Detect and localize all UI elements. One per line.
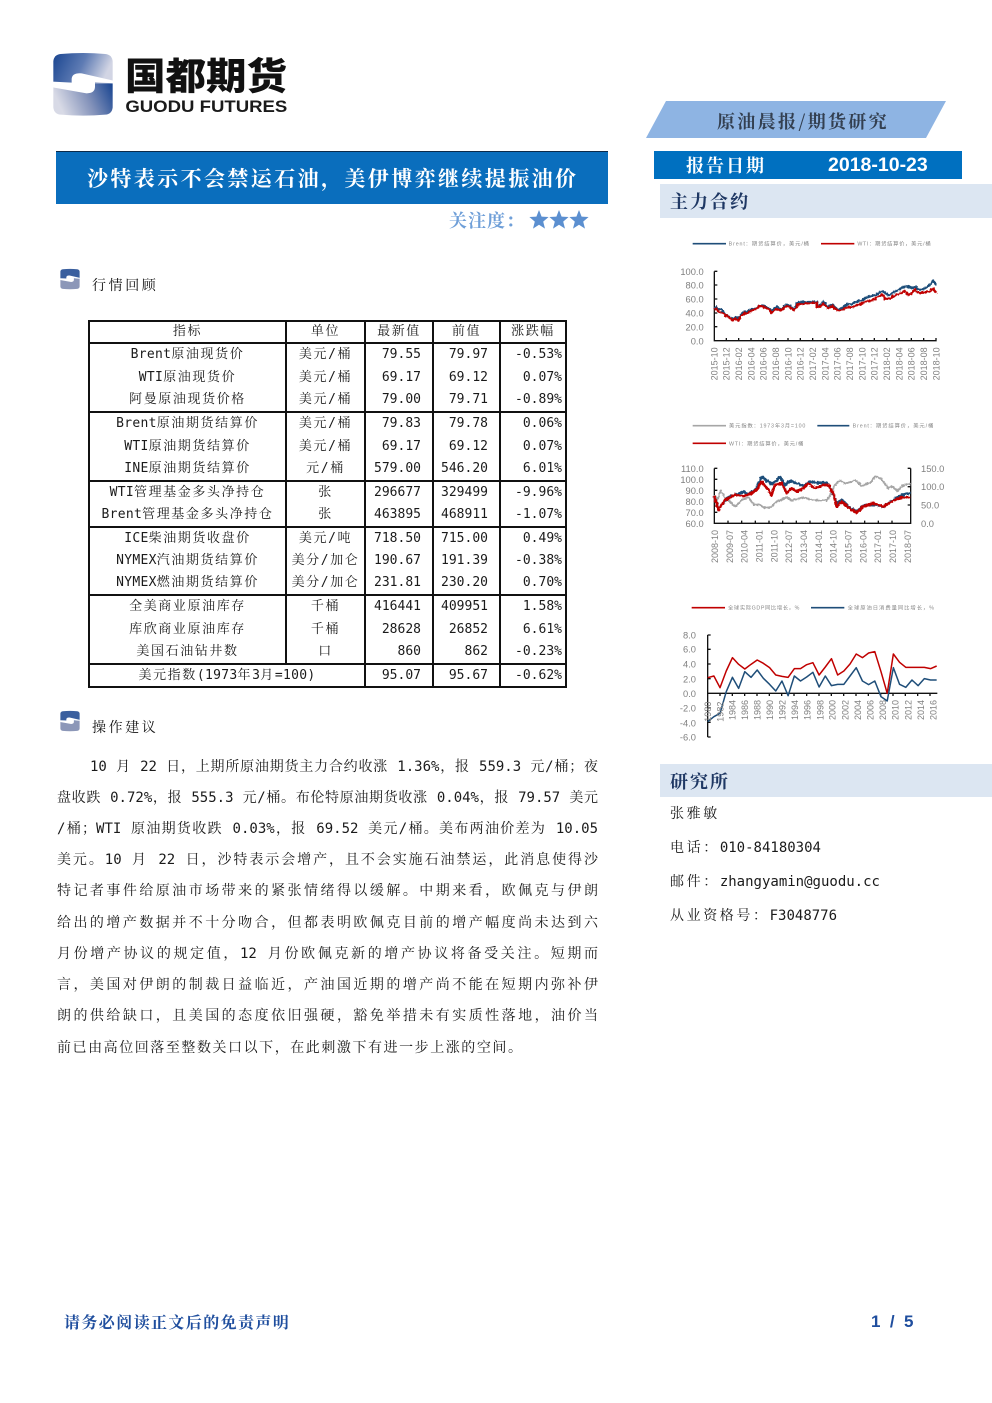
chart: dollar index vs Brent and WTI: 2011-01 xyxy=(754,530,764,562)
category banner xyxy=(646,101,946,138)
market data table: 涨跌幅 xyxy=(511,324,555,339)
market data table: 美元/桶 xyxy=(299,370,352,384)
chart: world GDP vs oil consumption growth: 1982 xyxy=(715,702,725,722)
market data table: ICE柴油期货收盘价 xyxy=(124,531,251,546)
heading: main contract xyxy=(660,184,992,218)
report date value: 2018-10-23 xyxy=(828,154,928,176)
chart: dollar index vs Brent and WTI: 2013-04 xyxy=(799,530,809,563)
report date bar xyxy=(654,151,962,179)
market data table: 79.83 xyxy=(382,416,421,431)
market data table: 美元/桶 xyxy=(299,392,352,407)
body text: 美元。10 月 22 日，沙特表示会增产，且不会实施石油禁运，此消息使得沙 xyxy=(57,852,598,868)
chart: world GDP vs oil consumption growth: -6.0 xyxy=(680,733,696,743)
icon: section bullet operation advice xyxy=(60,710,80,732)
market data table: -0.62% xyxy=(515,668,562,682)
icon: section bullet market review xyxy=(60,268,80,290)
page number: 1 / 5 xyxy=(871,1312,914,1331)
chart: Brent and WTI settlement price: 100.0 xyxy=(680,267,704,277)
chart: Brent and WTI settlement price: 40.0 xyxy=(686,309,704,319)
chart: world GDP vs oil consumption growth: 2014 xyxy=(916,700,926,720)
chart: Brent and WTI settlement price: 2016-04 xyxy=(746,347,756,380)
chart: Brent and WTI settlement price: 80.0 xyxy=(686,281,704,291)
chart: dollar index vs Brent and WTI: 2012-07 xyxy=(784,530,794,563)
chart: Brent and WTI settlement price: 0.0 xyxy=(691,336,704,346)
chart: world GDP vs oil consumption growth: 2016 xyxy=(929,700,939,720)
analyst contact: 张雅敏 xyxy=(670,806,720,822)
chart: world GDP vs oil consumption growth: 1984 xyxy=(728,700,738,720)
chart: world GDP vs oil consumption growth xyxy=(680,604,939,743)
market data table: -1.07% xyxy=(515,507,562,522)
market data table: 千桶 xyxy=(311,622,340,636)
legend xyxy=(692,604,934,612)
market data table: 190.67 xyxy=(374,553,421,568)
heading: research institute xyxy=(660,764,992,797)
chart: dollar index vs Brent and WTI: 2014-10 xyxy=(829,530,839,563)
market data table: 美元/桶 xyxy=(299,416,352,431)
chart: Brent and WTI settlement price: 60.0 xyxy=(686,295,704,305)
market data table: 715.00 xyxy=(441,531,488,546)
chart: Brent and WTI settlement price: 2017-12 xyxy=(870,347,880,380)
market data table: 463895 xyxy=(374,507,421,522)
legend: 全球原油日消费量同比增长，% xyxy=(848,604,934,612)
market data table: -0.23% xyxy=(515,644,562,659)
chart: world GDP vs oil consumption growth: 1988 xyxy=(752,700,762,720)
market data table: 26852 xyxy=(449,622,488,636)
body text: /桶；WTI 原油期货收跌 0.03%，报 69.52 美元/桶。美布两油价差为 10.05 xyxy=(57,821,598,837)
chart: Brent and WTI settlement price: 2016-06 xyxy=(759,347,769,380)
market data table: 最新值 xyxy=(377,324,421,339)
market data table: 美分/加仑 xyxy=(292,575,359,590)
market data table: 579.00 xyxy=(374,461,421,476)
market data table: 860 xyxy=(398,644,421,659)
market data table xyxy=(88,320,567,688)
chart: world GDP vs oil consumption growth: 2010 xyxy=(891,700,901,720)
market data table: 6.01% xyxy=(523,461,562,476)
legend: 全球实际GDP同比增长，% xyxy=(728,604,800,612)
heading: operation advice: 操作建议 xyxy=(92,720,158,736)
chart: dollar index vs Brent and WTI: 2010-04 xyxy=(740,530,750,563)
market data table: 191.39 xyxy=(441,553,488,568)
market data table: 69.12 xyxy=(449,370,488,384)
legend: Brent：期货结算价，美元/桶 xyxy=(729,240,809,248)
market data table: -0.89% xyxy=(515,392,562,407)
market data table: 546.20 xyxy=(441,461,488,476)
market data table: Brent原油期货结算价 xyxy=(116,416,259,431)
chart: Brent and WTI settlement price: 2016-08 xyxy=(771,347,781,380)
chart: world GDP vs oil consumption growth: 1986 xyxy=(740,700,750,720)
heading: main contract: 主力合约 xyxy=(670,188,750,214)
chart: world GDP vs oil consumption growth: 8.0 xyxy=(683,631,696,641)
analyst contact: 从业资格号：F3048776 xyxy=(670,908,837,924)
market data table: 862 xyxy=(465,644,488,659)
chart: dollar index vs Brent and WTI: 110.0 xyxy=(681,464,704,474)
chart: dollar index vs Brent and WTI: 2017-10 xyxy=(888,530,898,563)
body text: 盘收跌 0.72%，报 555.3 元/桶。布伦特原油期货收涨 0.04%，报 79.57 美元 xyxy=(57,790,598,806)
chart: dollar index vs Brent and WTI: 0.0 xyxy=(921,519,934,529)
chart: world GDP vs oil consumption growth: 2.0 xyxy=(683,675,696,685)
market data table: 69.12 xyxy=(449,438,488,454)
market data table: 张 xyxy=(318,485,333,500)
market data table: 409951 xyxy=(441,599,488,614)
chart: dollar index vs Brent and WTI: 2018-07 xyxy=(903,530,913,563)
market data table: 美元指数(1973年3月=100) xyxy=(138,668,316,682)
market data table: WTI原油期货结算价 xyxy=(124,438,251,454)
market data table: 95.67 xyxy=(449,668,488,682)
market data table: -0.53% xyxy=(515,347,562,362)
heading: research institute: 研究所 xyxy=(670,768,730,794)
legend: 美元指数：1973年3月=100 xyxy=(729,422,805,430)
market data table: 元/桶 xyxy=(306,461,345,476)
title bar: 沙特表示不会禁运石油，美伊博弈继续提振油价 xyxy=(87,163,578,193)
chart: Brent and WTI settlement price: 2017-10 xyxy=(857,347,867,380)
body text: 10 月 22 日，上期所原油期货主力合约收涨 1.36%，报 559.3 元/桶；夜 xyxy=(90,759,598,775)
chart: world GDP vs oil consumption growth: 4.0 xyxy=(683,660,696,670)
footer disclaimer: 请务必阅读正文后的免责声明 xyxy=(64,1310,290,1333)
market data table: 468911 xyxy=(441,507,488,522)
body text: 前已由高位回落至整数关口以下，在此刺激下有进一步上涨的空间。 xyxy=(57,1040,524,1056)
body text: 特记者事件给原油市场带来的紧张情绪得以缓解。中期来看，欧佩克与伊朗 xyxy=(57,883,598,899)
market data table: 230.20 xyxy=(441,575,488,590)
legend: WTI：期货结算价，美元/桶 xyxy=(857,240,931,248)
chart: world GDP vs oil consumption growth: 1998 xyxy=(815,700,825,720)
legend: WTI：期货结算价，美元/桶 xyxy=(729,439,803,447)
chart: world GDP vs oil consumption growth: 1992 xyxy=(777,700,787,720)
analyst contact: 邮件：zhangyamin@guodu.cc xyxy=(670,874,880,890)
category banner text: 原油晨报/期货研究 xyxy=(717,108,889,134)
chart: Brent and WTI settlement price: 2017-02 xyxy=(808,347,818,380)
chart: dollar index vs Brent and WTI: 50.0 xyxy=(921,501,939,511)
chart: dollar index vs Brent and WTI xyxy=(680,422,944,563)
market data table: 全美商业原油库存 xyxy=(129,599,246,614)
chart: world GDP vs oil consumption growth: 2012 xyxy=(903,700,913,720)
market data table: 美分/加仑 xyxy=(292,553,359,568)
attention rating xyxy=(449,207,588,233)
chart: world GDP vs oil consumption growth: 2002 xyxy=(840,700,850,720)
chart: Brent and WTI settlement price: 2018-02 xyxy=(882,347,892,380)
chart: world GDP vs oil consumption growth: 2004 xyxy=(853,700,863,720)
body text: 朗的供给缺口，且美国的态度依旧强硬，豁免举措未有实质性落地，油价当 xyxy=(57,1008,598,1024)
chart: Brent and WTI settlement price: 2018-08 xyxy=(919,347,929,380)
chart: dollar index vs Brent and WTI: 2008-10 xyxy=(710,530,720,563)
market data table: WTI管理基金多头净持仓 xyxy=(110,485,265,500)
market data table: 库欣商业原油库存 xyxy=(129,622,246,636)
market data table: 1.58% xyxy=(523,599,562,614)
chart: Brent and WTI settlement price: 20.0 xyxy=(686,322,704,332)
logo: Guodu Futures: 国都期货 xyxy=(125,46,287,100)
market data table: 231.81 xyxy=(374,575,421,590)
chart: dollar index vs Brent and WTI: 60.0 xyxy=(686,519,704,529)
chart: dollar index vs Brent and WTI: 2017-01 xyxy=(873,530,883,563)
market data table: 28628 xyxy=(382,622,421,636)
chart: dollar index vs Brent and WTI: 80.0 xyxy=(686,497,704,507)
market data table: 阿曼原油现货价格 xyxy=(129,392,246,407)
market data table: WTI原油现货价 xyxy=(139,370,236,384)
market data table: 6.61% xyxy=(523,622,562,636)
market data table: 718.50 xyxy=(374,531,421,546)
market data table: 69.17 xyxy=(382,370,421,384)
body text: 月份增产协议的规定值，12 月份欧佩克新的增产协议将备受关注。短期而 xyxy=(57,946,598,962)
chart: dollar index vs Brent and WTI: 2014-01 xyxy=(814,530,824,563)
chart: dollar index vs Brent and WTI: 2009-07 xyxy=(725,530,735,563)
chart: world GDP vs oil consumption growth: 2008 xyxy=(878,700,888,720)
market data table: Brent原油现货价 xyxy=(131,347,244,362)
chart: Brent and WTI settlement price: 2016-10 xyxy=(783,347,793,380)
body text: 言，美国对伊朗的制裁日益临近，产油国近期的增产尚不能在短期内弥补伊 xyxy=(57,977,598,993)
chart: Brent and WTI settlement price: 2015-12 xyxy=(722,347,732,380)
chart: dollar index vs Brent and WTI: 150.0 xyxy=(921,464,944,474)
chart: world GDP vs oil consumption growth: 1990 xyxy=(765,700,775,720)
chart: Brent and WTI settlement price: 2016-12 xyxy=(796,347,806,380)
chart: Brent and WTI settlement price: 2018-04 xyxy=(894,347,904,380)
chart: world GDP vs oil consumption growth: -2.0 xyxy=(680,704,696,714)
market data table: 329499 xyxy=(441,485,488,500)
market data table: 0.70% xyxy=(523,575,562,590)
market data table: 69.17 xyxy=(382,438,421,454)
chart: world GDP vs oil consumption growth: 1996 xyxy=(803,700,813,720)
chart: dollar index vs Brent and WTI: 100.0 xyxy=(680,475,704,485)
market data table: 0.07% xyxy=(523,370,562,384)
chart: Brent and WTI settlement price xyxy=(680,240,941,380)
market data table: 千桶 xyxy=(311,599,340,614)
market data table: 79.78 xyxy=(449,416,488,431)
market data table: 79.97 xyxy=(449,347,488,362)
legend: Brent：期货结算价，美元/桶 xyxy=(853,422,933,430)
market data table: 0.07% xyxy=(523,438,562,454)
heading: market review: 行情回顾 xyxy=(92,278,158,294)
analyst contact: 电话：010-84180304 xyxy=(670,840,821,856)
chart: world GDP vs oil consumption growth: 1994 xyxy=(790,700,800,720)
market data table: 美元/吨 xyxy=(299,531,352,546)
market data table: 79.00 xyxy=(382,392,421,407)
chart: world GDP vs oil consumption growth: 2000 xyxy=(828,700,838,720)
body text: 给出的增产数据并不十分吻合，但都表明欧佩克目前的增产幅度尚未达到六 xyxy=(57,915,598,931)
chart: dollar index vs Brent and WTI: 100.0 xyxy=(921,482,944,492)
market data table: 指标 xyxy=(173,324,202,339)
chart: dollar index vs Brent and WTI: 90.0 xyxy=(686,486,704,496)
chart: world GDP vs oil consumption growth: 0.0 xyxy=(683,689,696,699)
report date label: 报告日期 xyxy=(686,152,766,178)
logo: Guodu Futures: GUODU FUTURES xyxy=(125,97,287,116)
market data table: NYMEX汽油期货结算价 xyxy=(116,553,259,568)
market data table: 416441 xyxy=(374,599,421,614)
body text xyxy=(57,758,598,1056)
rating stars xyxy=(530,210,588,229)
market data table: 95.07 xyxy=(382,668,421,682)
market data table: 前值 xyxy=(452,324,481,339)
market data table: 张 xyxy=(318,507,333,522)
market data table: Brent管理基金多头净持仓 xyxy=(101,507,274,522)
market data table: 口 xyxy=(318,644,333,659)
title bar xyxy=(56,151,608,204)
chart: Brent and WTI settlement price: 2015-10 xyxy=(709,347,719,380)
market data table: INE原油期货结算价 xyxy=(124,461,251,476)
attention rating: 关注度： xyxy=(449,207,525,233)
legend xyxy=(693,422,933,447)
market data table: 79.71 xyxy=(449,392,488,407)
chart: world GDP vs oil consumption growth: 1980 xyxy=(703,702,713,722)
chart: Brent and WTI settlement price: 2017-04 xyxy=(820,347,830,380)
market data table: NYMEX燃油期货结算价 xyxy=(116,575,259,590)
chart: Brent and WTI settlement price: 2017-06 xyxy=(833,347,843,380)
market data table: 79.55 xyxy=(382,347,421,362)
market data table: 0.06% xyxy=(523,416,562,431)
market data table: 美元/桶 xyxy=(299,347,352,362)
market data table: -9.96% xyxy=(515,485,562,500)
market data table: 美元/桶 xyxy=(299,438,352,454)
chart: dollar index vs Brent and WTI: 2015-07 xyxy=(844,530,854,563)
chart: Brent and WTI settlement price: 2017-08 xyxy=(845,347,855,380)
market data table: -0.38% xyxy=(515,553,562,568)
market data table: 单位 xyxy=(311,324,340,339)
legend xyxy=(693,240,931,248)
chart: Brent and WTI settlement price: 2018-10 xyxy=(931,347,941,380)
chart: world GDP vs oil consumption growth: -4.0 xyxy=(680,718,696,728)
market data table: 0.49% xyxy=(523,531,562,546)
chart: Brent and WTI settlement price: 2016-02 xyxy=(734,347,744,380)
market data table: 296677 xyxy=(374,485,421,500)
chart: dollar index vs Brent and WTI: 2011-10 xyxy=(769,530,779,562)
chart: dollar index vs Brent and WTI: 70.0 xyxy=(686,508,704,518)
analyst contact xyxy=(670,806,880,924)
chart: dollar index vs Brent and WTI: 2016-04 xyxy=(858,530,868,563)
market data table: 美国石油钻井数 xyxy=(136,644,239,659)
logo: Guodu Futures xyxy=(53,46,287,116)
chart: world GDP vs oil consumption growth: 2006 xyxy=(865,700,875,720)
chart: Brent and WTI settlement price: 2018-06 xyxy=(907,347,917,380)
chart: world GDP vs oil consumption growth: 6.0 xyxy=(683,645,696,655)
